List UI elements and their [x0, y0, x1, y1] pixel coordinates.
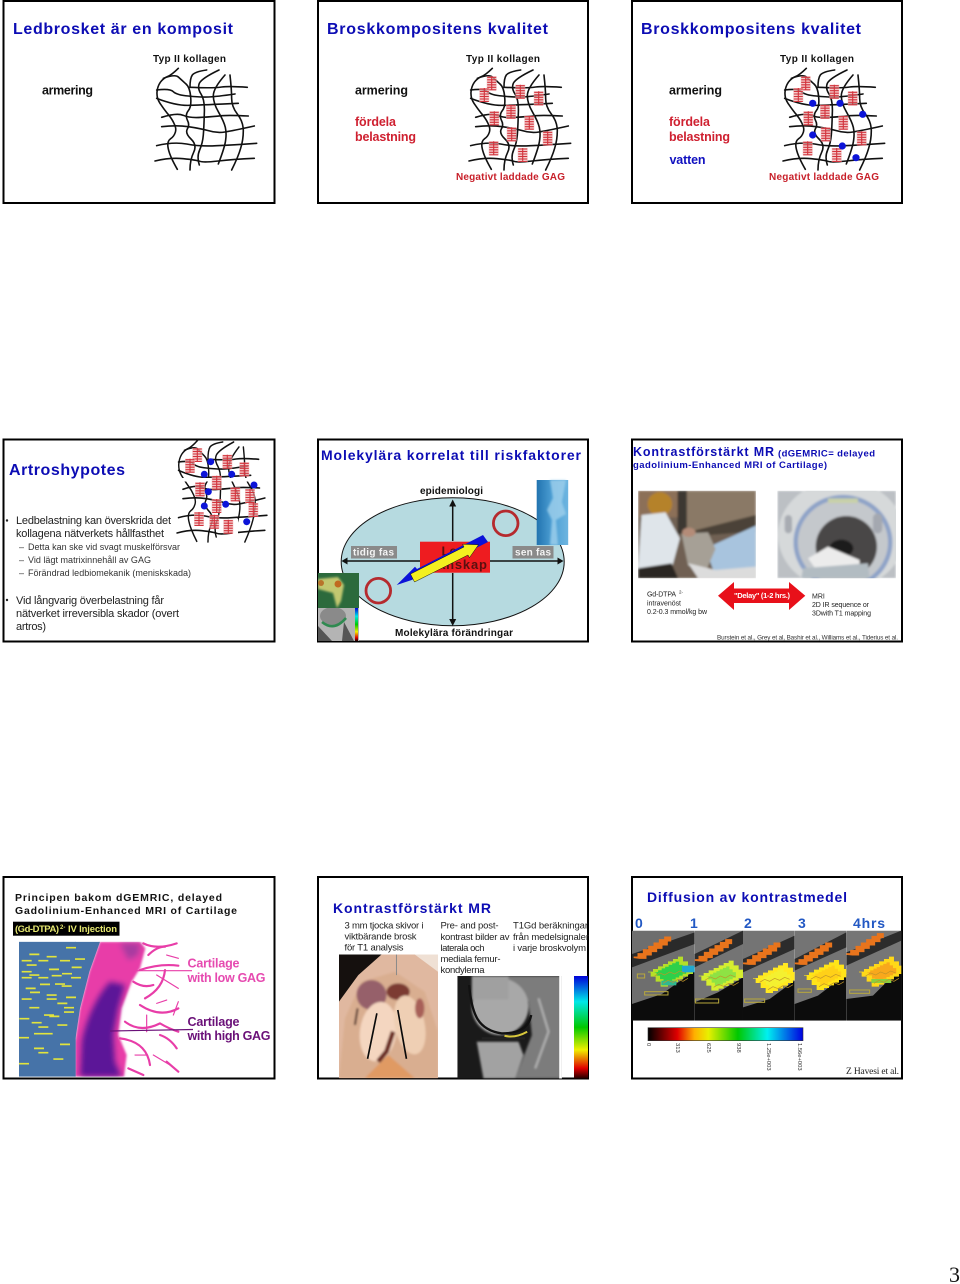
- text: Gd-DTPA: [647, 590, 708, 616]
- label: Gd-DTPA IV injection: [13, 922, 120, 936]
- panel: Principen bakom dGEMRIC: [4, 877, 274, 1078]
- arrow: blue diagonal: [397, 535, 488, 585]
- text column 2: kontrast bilder av: [440, 932, 510, 943]
- colour bar: 625: [705, 1043, 711, 1053]
- title: Ledbrosket är en komposit: [13, 21, 234, 38]
- label: sen fas: sen fas: [515, 548, 551, 558]
- title: Broskkompositens kvalitet: [641, 21, 862, 38]
- label: Cartilage with high GAG: [186, 1015, 270, 1043]
- arrow: Delay double arrow: [718, 582, 805, 610]
- text: MRI: [812, 594, 871, 618]
- text: MRI: MRI: [812, 594, 825, 600]
- text column 2: laterala och: [440, 943, 484, 954]
- collagen network: [155, 68, 257, 170]
- label: armering: armering: [42, 84, 93, 98]
- bullet list: Ledbelastning: –: [19, 555, 24, 565]
- label: Typ II kollagen: Typ II kollagen: [466, 54, 540, 65]
- text: Gd-DTPA: intravenöst: [647, 600, 681, 608]
- label: Gd-DTPA IV injection: (Gd-DTPA): [15, 924, 59, 935]
- text column 1: [344, 920, 424, 954]
- heading: Principen bakom dGEMRIC, delayed: [15, 892, 222, 904]
- label: fördela belastning: belastning: [355, 130, 416, 144]
- label: Gd-DTPA IV injection: 2-: [60, 925, 65, 931]
- label: Typ II kollagen: Typ II kollagen: [153, 54, 226, 65]
- label: vatten: vatten: [670, 153, 706, 167]
- panel: Ledbrosket är en komposit: [4, 1, 274, 203]
- image: knee MR: [457, 976, 562, 1078]
- panel: Kontrastförstärkt MR dGEMRIC: [632, 440, 905, 642]
- label: Cartilage with high GAG: Cartilage: [188, 1015, 240, 1029]
- text column 2: mediala femur-: [440, 954, 500, 965]
- label: Typ II kollagen: Typ II kollagen: [780, 54, 854, 65]
- title: (dGEMRIC= delayed: [778, 448, 875, 460]
- heading: Gadolinium-Enhanced MRI of Cartilage: [15, 905, 237, 917]
- colour bar: 1.25e+003: [765, 1043, 771, 1071]
- heat map: 4 hrs: [846, 930, 902, 1021]
- label: Negativt laddade GAG: Negativt laddade GAG: [456, 172, 565, 183]
- label: Cartilage with low GAG: with low GAG: [186, 971, 266, 985]
- citation: Z Havesi et al.: [846, 1067, 899, 1077]
- photo: MR scanner: [777, 490, 896, 578]
- label: fördela belastning: fördela: [355, 115, 397, 129]
- ellipse diagram: Le: [442, 544, 457, 558]
- text: Gd-DTPA: Gd-DTPA: [647, 592, 676, 598]
- text column 3: [513, 920, 589, 954]
- bullet list: Ledbelastning: Vid lägt matrixinnehåll av GAG: [28, 555, 151, 565]
- bullet list: Ledbelastning: Detta kan ske vid svagt muskelförsvar: [28, 542, 180, 552]
- ellipse diagram: [341, 498, 564, 626]
- damaged network: [174, 440, 272, 543]
- title: [633, 445, 875, 471]
- title: Diffusion av kontrastmedel: [647, 889, 847, 905]
- circle: early phase: [366, 578, 391, 603]
- time labels: [635, 915, 885, 931]
- circle: late phase: [493, 511, 518, 536]
- heat map: 2 hrs: [743, 930, 795, 1021]
- label: Gd-DTPA IV injection: IV Injection: [68, 924, 117, 935]
- panel: Broskkompositens kvalitet, GAG: [318, 1, 588, 203]
- label: Molekylära förändringar: Molekylära förändringar: [395, 628, 513, 639]
- label: Cartilage with low GAG: Cartilage: [188, 956, 240, 970]
- photo: knee x-ray: [537, 480, 568, 545]
- title: Artroshypotes: [9, 462, 125, 479]
- text column 1: för T1 analysis: [344, 942, 404, 954]
- panel: Molekylära korrelat till riskfaktorer: [318, 440, 588, 642]
- text column 2: Pre- and post-: [440, 920, 498, 932]
- time labels: 2: [744, 915, 752, 931]
- bullet list: Vid långvarig överbelastning: artros): [16, 621, 46, 633]
- text column 3: i varje broskvolym: [513, 943, 586, 954]
- collagen network with GAG: [469, 68, 571, 170]
- pointer: high GAG: [110, 1030, 193, 1031]
- heading: [15, 892, 237, 917]
- text column 3: från medelsignaler: [513, 932, 589, 943]
- bullet list: Vid långvarig överbelastning: nätverket irreversibla skador (overt: [16, 608, 179, 620]
- time labels: 0: [635, 915, 643, 931]
- colour bar: 938: [735, 1043, 741, 1053]
- text: MRI: 3Dwith T1 mapping: [812, 610, 871, 618]
- text column 1: viktbärande brosk: [344, 932, 417, 942]
- time labels: 4hrs: [853, 915, 885, 931]
- text column 2: kondylerna: [440, 965, 485, 976]
- photo: knee arthroscopy: [318, 573, 359, 608]
- bullet list: Ledbelastning: –: [19, 542, 24, 552]
- label: fördela belastning: fördela: [669, 115, 711, 129]
- text column 2: [440, 920, 510, 976]
- colour bar: [645, 1028, 803, 1071]
- text column 1: 3 mm tjocka skivor i: [344, 920, 424, 932]
- label: fördela belastning: [355, 115, 416, 144]
- photo: injection: [638, 490, 756, 578]
- heat map: 1 hr: [694, 930, 743, 1021]
- time labels: 1: [690, 915, 698, 931]
- heat map series: [632, 931, 904, 1021]
- panel: Kontrastförstärkt MR analys: [318, 877, 589, 1078]
- label: Negativt laddade GAG: Negativt laddade GAG: [769, 172, 879, 183]
- label: fördela belastning: [669, 115, 730, 144]
- bullet list: Ledbelastning: –: [19, 568, 24, 578]
- title: Broskkompositens kvalitet: [327, 21, 549, 38]
- time labels: 3: [798, 915, 806, 931]
- bullet list: Ledbelastning: [6, 515, 191, 578]
- citation: Burstein et al., Grey et al, Bashir et al., Williams et al., Tiderius et al.: [717, 634, 898, 642]
- title: Molekylära korrelat till riskfaktorer: [321, 447, 582, 463]
- label: Cartilage with low GAG: [186, 956, 266, 985]
- panel: Broskkompositens kvalitet, vatten: [632, 1, 902, 203]
- bullet list: Vid långvarig överbelastning: [6, 595, 179, 633]
- panel: Artroshypotes: [4, 440, 274, 642]
- label: Cartilage with high GAG: with high GAG: [186, 1029, 270, 1043]
- image: knee MR map: [318, 608, 359, 641]
- ellipse diagram: anskap: [438, 557, 487, 572]
- title: Kontrastförstärkt MR: [633, 445, 774, 459]
- pointer: low GAG: [136, 970, 192, 972]
- label: armering: armering: [669, 84, 722, 98]
- label: epidemiologi: epidemiologi: [420, 486, 483, 497]
- arrow: Delay double arrow: "Delay" (1-2 hrs.): [734, 591, 790, 600]
- photo: opened knee: [339, 954, 438, 1078]
- heat map: 3 hrs: [794, 930, 846, 1021]
- label: armering: armering: [355, 84, 408, 98]
- colour scale bar: [574, 976, 588, 1078]
- title: Kontrastförstärkt MR: [333, 900, 491, 916]
- collagen network with GAG and water: [783, 68, 885, 170]
- histology image: cartilage: [19, 942, 180, 1077]
- region outlines: [637, 974, 870, 1003]
- bullet list: Ledbelastning: Ledbelastning kan överskrida det: [16, 515, 171, 527]
- label: tidig fas: tidig fas: [353, 548, 394, 558]
- bullet list: Vid långvarig överbelastning: Vid långvarig överbelastning får: [16, 595, 164, 607]
- title: gadolinium-Enhanced MRI of Cartilage): [633, 460, 827, 471]
- text: Gd-DTPA: 0.2-0.3 mmol/kg bw: [647, 609, 708, 616]
- bullet list: Ledbelastning: Förändrad ledbiomekanik (meniskskada): [28, 568, 191, 578]
- colour bar: 0: [645, 1043, 651, 1046]
- text: Gd-DTPA: 2-: [679, 590, 684, 594]
- heat map: 0 hrs: [632, 930, 695, 1021]
- text: MRI: 2D IR sequence or: [812, 602, 870, 609]
- label: fördela belastning: belastning: [669, 130, 730, 144]
- text column 3: T1Gd beräkningar: [513, 920, 588, 932]
- bullet list: Ledbelastning: kollagena nätverkets hållfasthet: [16, 528, 164, 540]
- panel: Diffusion av kontrastmedel: [632, 877, 904, 1078]
- arrow: yellow diagonal: [410, 544, 478, 582]
- colour bar: 313: [674, 1043, 680, 1053]
- colour bar: 1.56e+003: [796, 1043, 802, 1071]
